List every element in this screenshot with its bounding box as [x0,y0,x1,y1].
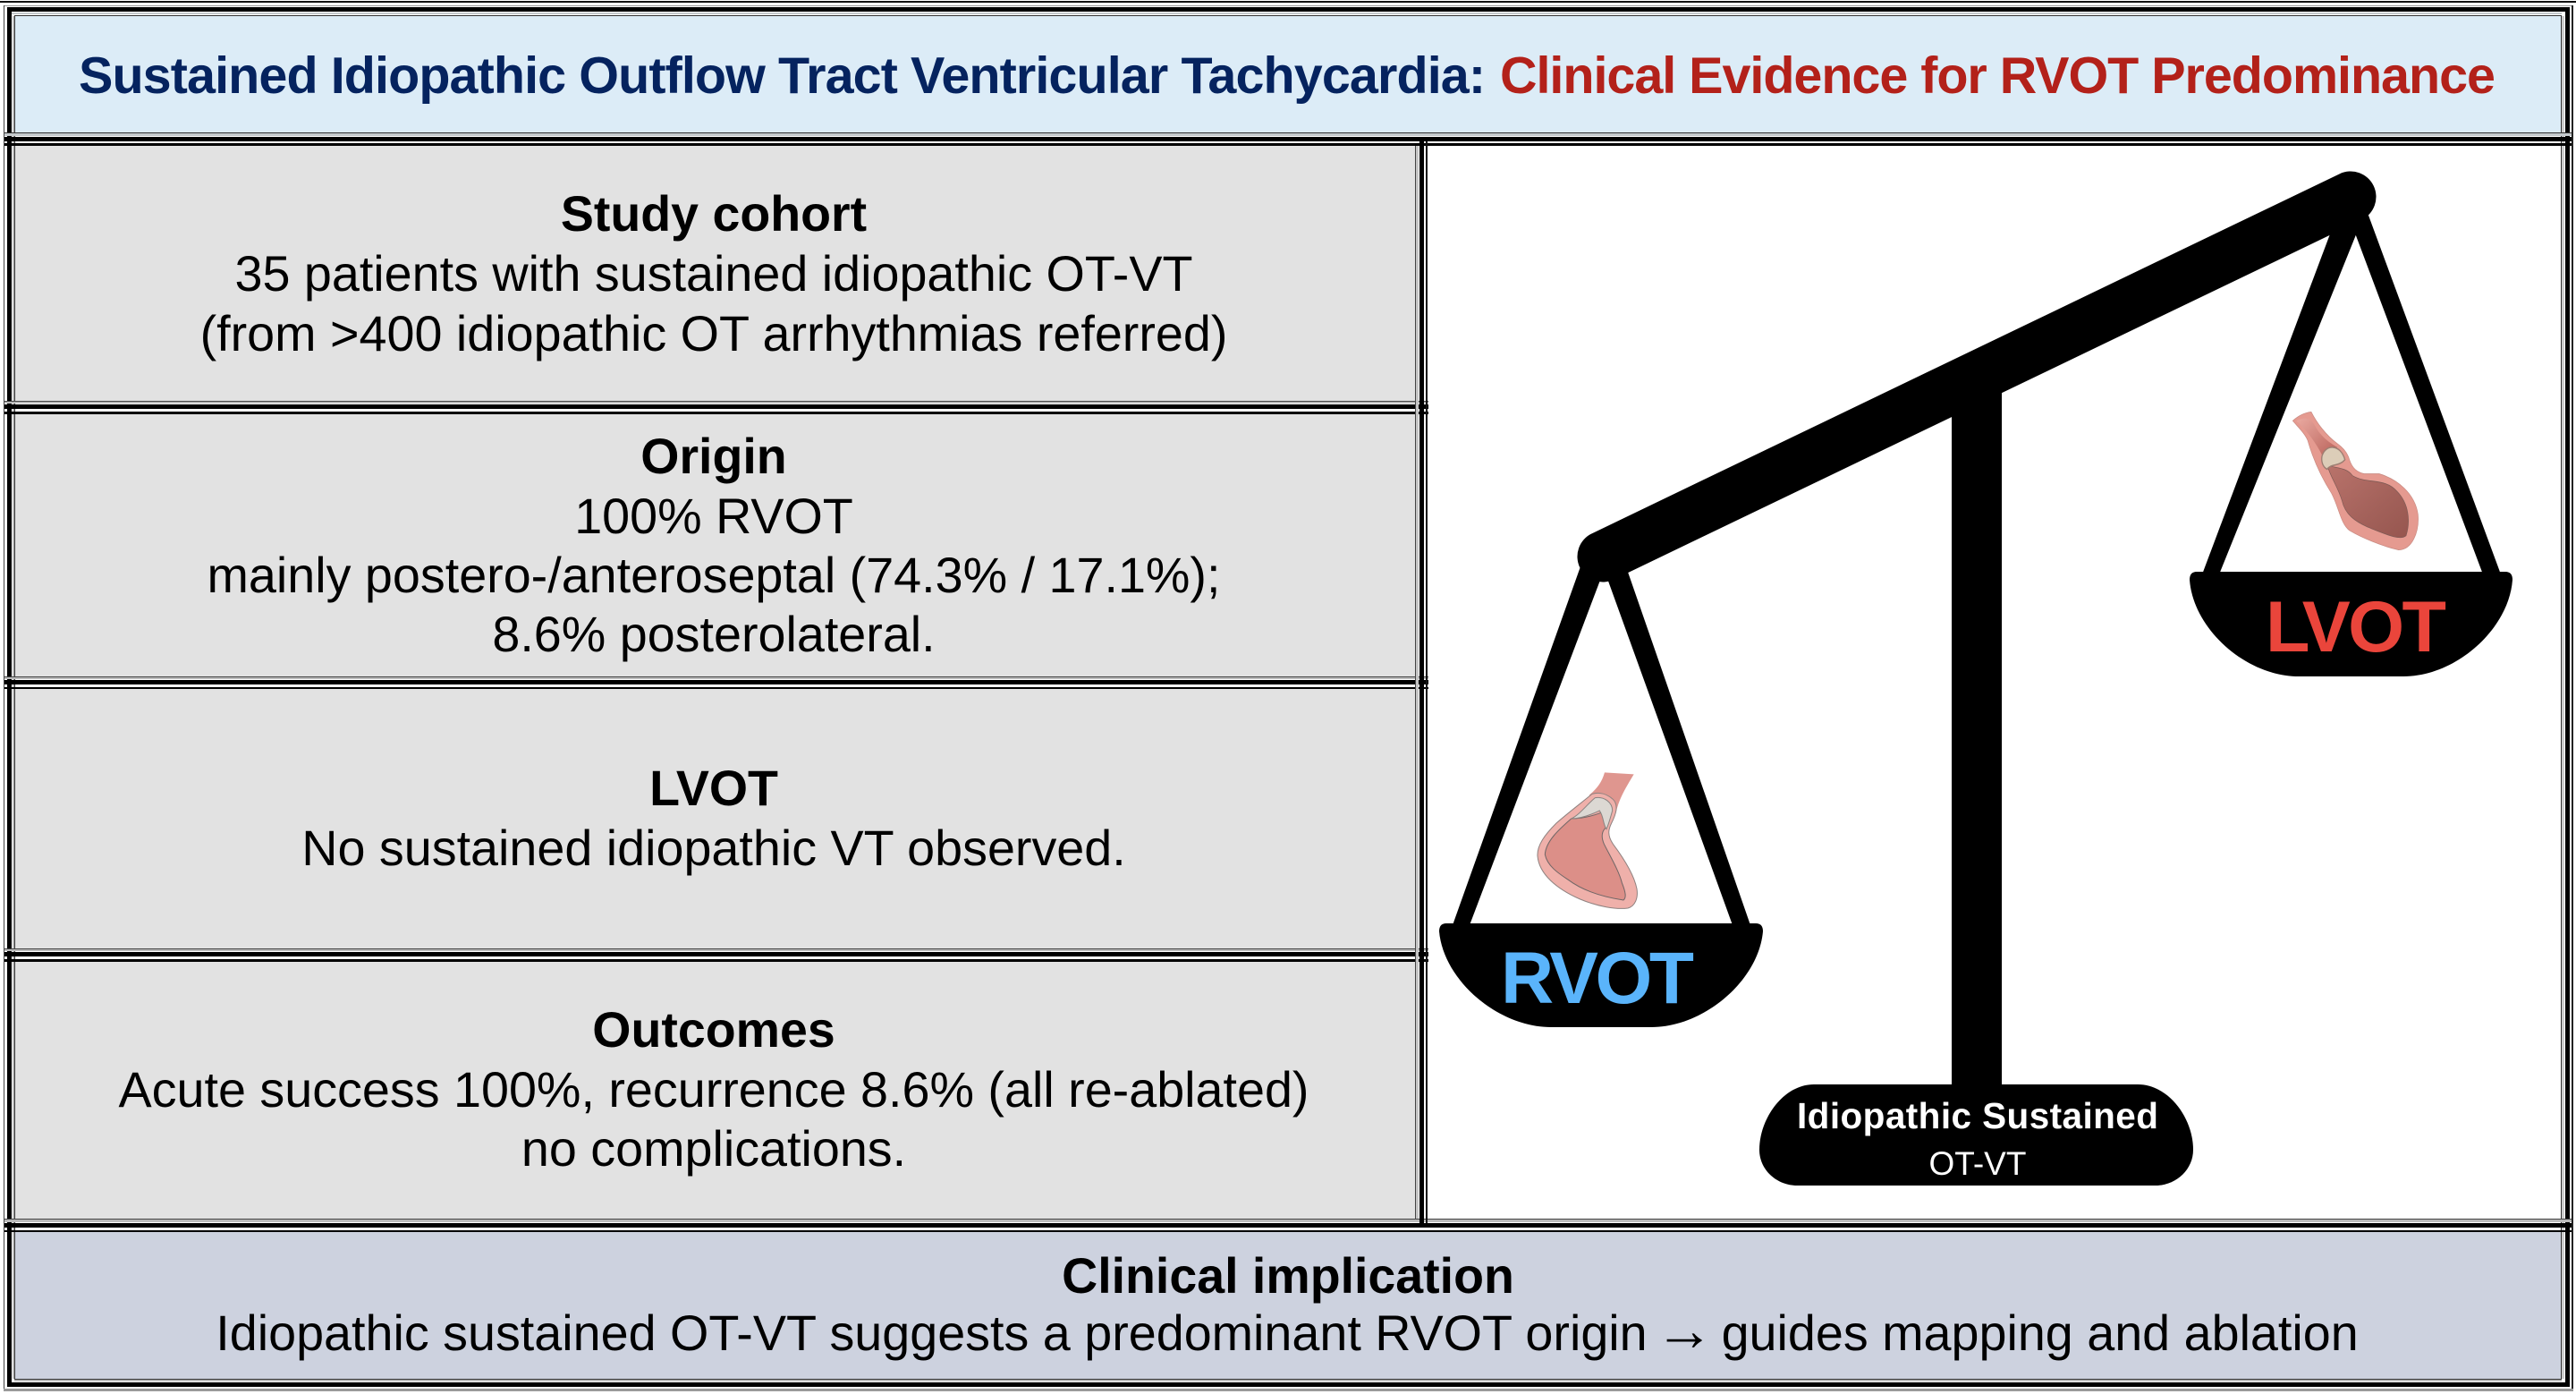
left pan: RVOT: RVOT [1501,938,1694,1019]
right pan: LVOT: LVOT [2266,587,2446,667]
panel: origin: 8.6% posterolateral. [492,607,936,662]
title text [79,47,2496,105]
base label: Idiopathic Sustained [1797,1095,2158,1136]
base label [1797,1095,2158,1182]
panel: study cohort: 35 patients with sustained idiopathic OT-VT [234,246,1193,302]
right pan: LVOT [2190,210,2512,676]
panel: origin: Origin [640,429,787,484]
scale column and base [1759,376,2193,1186]
tilted beam [1603,197,2351,557]
panel: clinical implication: Idiopathic sustained OT-VT suggests a predominant RVOT origin → guides mapping and ablation [216,1296,2359,1363]
panel: outcomes: no complications. [521,1121,906,1177]
panel: outcomes: Acute success 100%, recurrence 8.6% (all re-ablated) [119,1062,1309,1118]
title panel [15,16,2561,132]
title text: Sustained Idiopathic Outflow Tract Ventricular Tachycardia: [79,47,1486,105]
panel: origin: mainly postero-/anteroseptal (74.3% / 17.1%); [208,548,1220,603]
panel: origin [15,414,1415,676]
icon: right ventricular outflow tract [1538,772,1637,908]
panel: clinical implication: Clinical implication [1062,1248,1514,1304]
left pan: RVOT [1439,557,1763,1027]
base label: OT-VT [1929,1145,2026,1182]
panel: LVOT: LVOT [649,761,778,816]
icon: left ventricular outflow tract [2292,412,2419,550]
panel: study cohort: (from >400 idiopathic OT arrhythmias referred) [200,306,1227,361]
panel: study cohort: Study cohort [561,186,867,242]
panel: clinical implication [15,1232,2561,1379]
panel: balance scale illustration [1428,146,2561,1219]
panel: LVOT [15,689,1415,948]
panel: study cohort [15,146,1415,401]
title text: Clinical Evidence for RVOT Predominance [1500,47,2496,105]
panel: outcomes [15,962,1415,1219]
panel: origin: 100% RVOT [574,489,853,544]
panel: outcomes: Outcomes [592,1002,835,1058]
panel: LVOT: No sustained idiopathic VT observed. [301,820,1126,876]
